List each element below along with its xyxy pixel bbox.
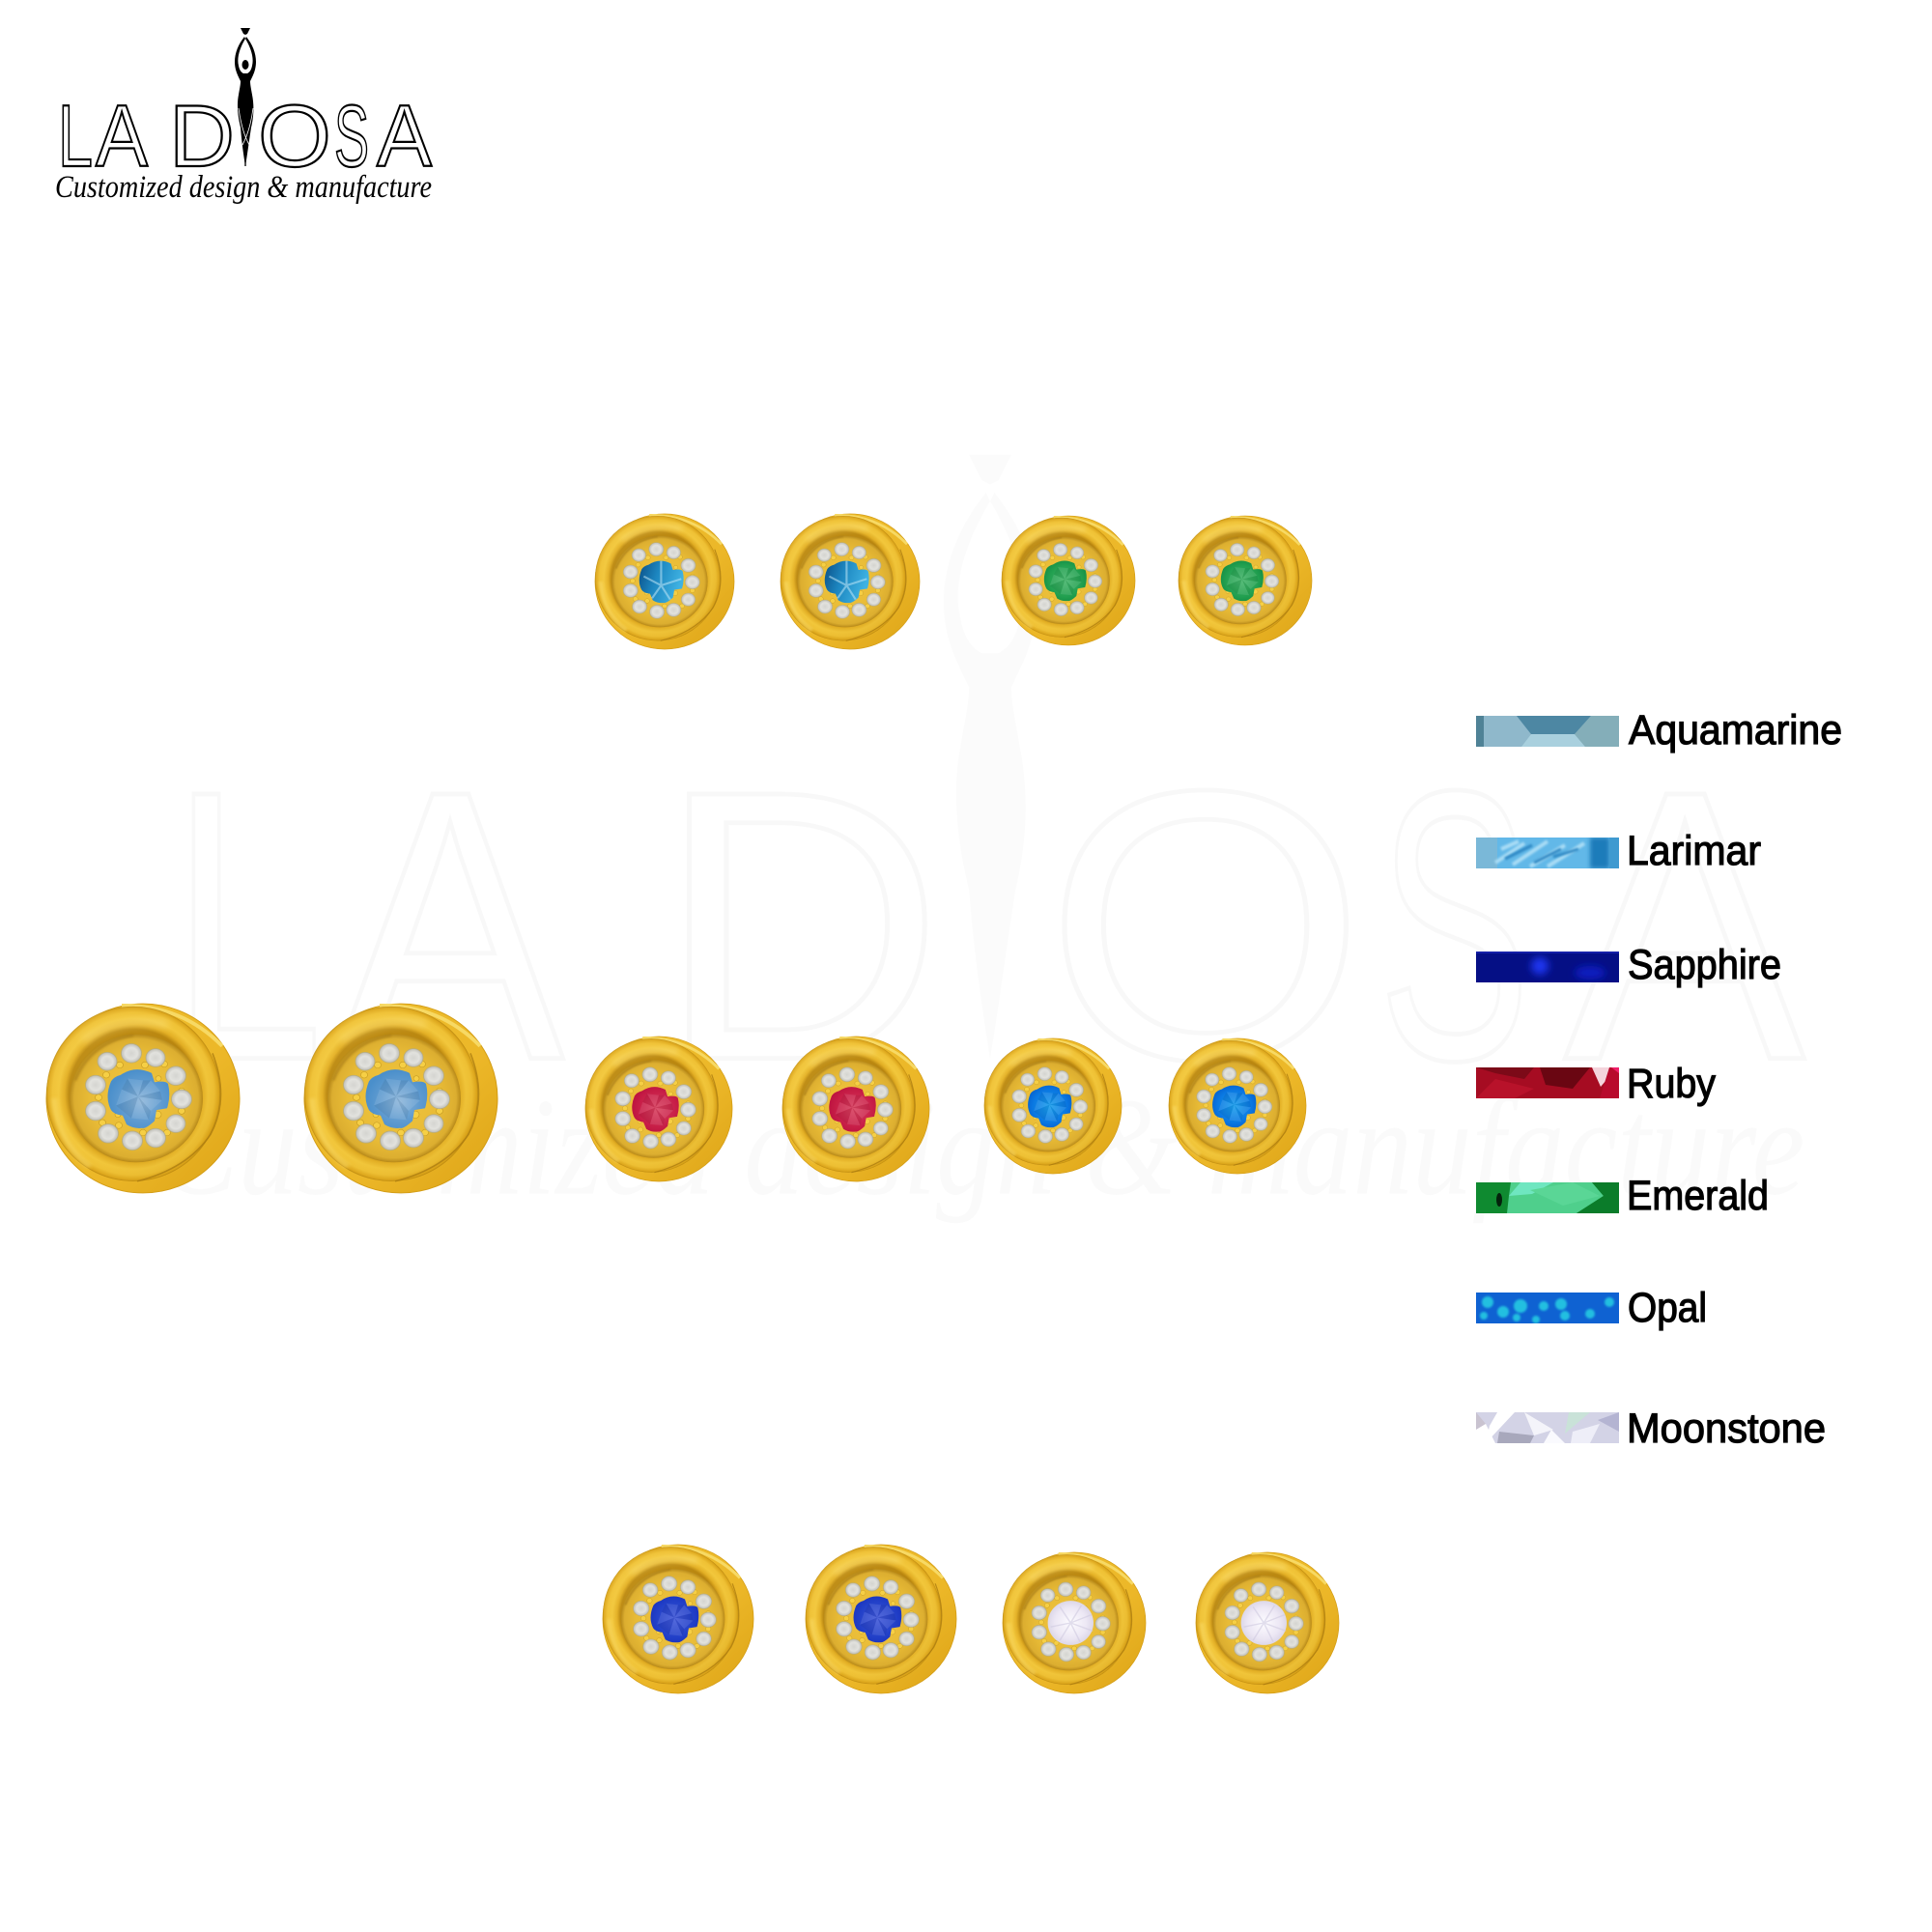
legend item: Opal [1476, 1291, 1705, 1331]
legend item: Opal: Opal [1628, 1285, 1707, 1331]
legend [1476, 707, 1842, 1452]
logo wordmark: S [334, 88, 369, 185]
legend item: Moonstone [1476, 1412, 1825, 1443]
logo tagline: Customized design & manufacture [55, 170, 432, 205]
logo wordmark: O [258, 88, 331, 185]
legend item: Moonstone: Moonstone [1627, 1406, 1826, 1452]
earring: moonstone 2 [1196, 1552, 1339, 1693]
earring: ruby 2 [782, 1037, 929, 1181]
legend item: Sapphire: Sapphire [1628, 942, 1781, 988]
logo wordmark: D [169, 88, 235, 185]
earring row 3 [603, 1545, 1339, 1693]
logo wordmark: A [377, 88, 432, 185]
earring: opal 1 [984, 1038, 1122, 1174]
earring row 1 [595, 514, 1312, 649]
legend item: Ruby: Ruby [1627, 1061, 1716, 1107]
earring: sapphire 1 [603, 1545, 753, 1693]
watermark: faint logo: S [1378, 712, 1530, 1141]
earring: opal 2 [1169, 1038, 1306, 1174]
legend item: Ruby [1476, 1066, 1717, 1107]
watermark: faint logo: A [336, 712, 565, 1141]
earring: sapphire 2 [806, 1545, 956, 1693]
earring: aquamarine large 2 [304, 1004, 497, 1193]
earring: emerald 1 [1002, 516, 1135, 645]
legend item: Emerald [1476, 1179, 1767, 1213]
watermark: faint logo [158, 455, 1806, 1224]
logo [55, 28, 432, 205]
watermark: faint logo: O [1045, 712, 1366, 1141]
earring row 2 [46, 1004, 1306, 1193]
watermark: faint logo: A [1564, 712, 1806, 1141]
watermark: faint logo: D [657, 712, 944, 1141]
earring: emerald 2 [1179, 516, 1312, 645]
logo wordmark: A [96, 88, 148, 185]
earring: moonstone 1 [1003, 1552, 1146, 1693]
earring: larimar 2 [781, 514, 920, 649]
legend item: Emerald: Emerald [1627, 1173, 1769, 1219]
logo wordmark: I [243, 88, 247, 185]
legend item: Larimar [1476, 834, 1761, 868]
legend item: Larimar: Larimar [1627, 828, 1761, 874]
logo wordmark [58, 88, 432, 185]
legend item: Aquamarine [1476, 713, 1841, 753]
earring: aquamarine large 1 [46, 1004, 240, 1193]
logo wordmark: L [58, 88, 93, 185]
watermark: faint logo: L [171, 712, 324, 1141]
earring: ruby 1 [585, 1037, 732, 1181]
legend item: Sapphire [1476, 948, 1780, 988]
legend item: Aquamarine: Aquamarine [1629, 707, 1842, 753]
logo figure icon [235, 28, 256, 166]
earring: larimar 1 [595, 514, 734, 649]
